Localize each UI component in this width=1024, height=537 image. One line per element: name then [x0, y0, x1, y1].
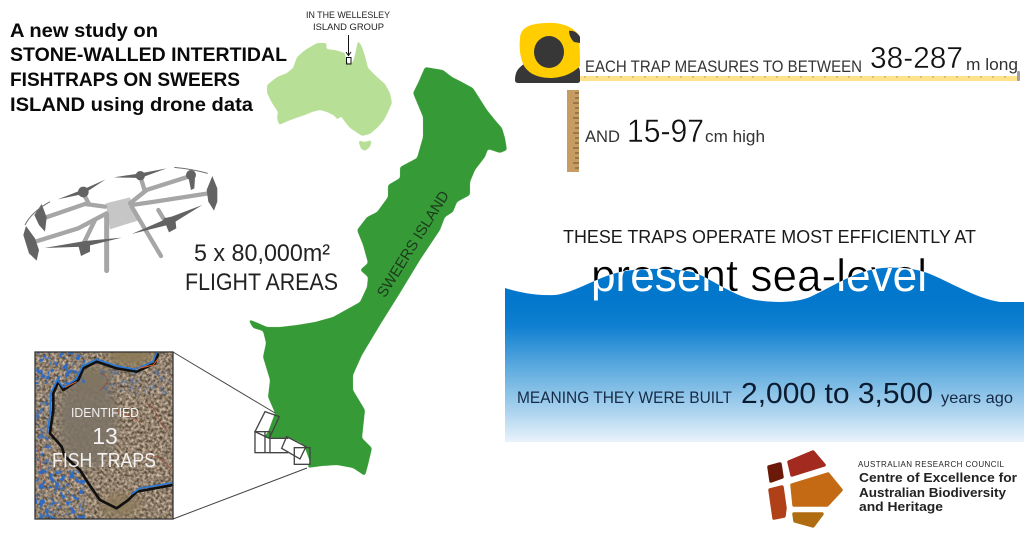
trap walls [37, 353, 173, 508]
logo text: Centre of Excellence for [859, 471, 1017, 485]
length text: EACH TRAP MEASURES TO BETWEEN [585, 58, 862, 76]
icon: drone [23, 167, 217, 271]
panel: sea wave [505, 268, 1024, 442]
label: identified 13 fish traps [52, 405, 156, 472]
flight areas label [185, 240, 338, 296]
height text: 15-97 [627, 113, 704, 149]
logo text: AUSTRALIAN RESEARCH COUNCIL [858, 460, 1005, 469]
flight areas label: FLIGHT AREAS [185, 269, 338, 296]
height text: cm high [705, 127, 765, 146]
icon: Australia map [267, 40, 392, 151]
logo: Centre of Excellence [769, 452, 841, 526]
text: built years ago: MEANING THEY WERE BUILT [517, 388, 732, 407]
text: built years ago: years ago [941, 390, 1013, 407]
map: Sweers Island [248, 67, 507, 476]
tape strip [580, 71, 1020, 81]
icon: ruler [567, 90, 579, 172]
flight areas label: 5 x 80,000m² [194, 240, 330, 267]
length text: m long [966, 55, 1018, 74]
title: FISHTRAPS ON SWEERS [10, 69, 240, 91]
heading: present sea-level (white under water): present sea-level [591, 250, 927, 301]
label: identified 13 fish traps: 13 [92, 423, 118, 449]
height text [585, 113, 765, 149]
label: identified 13 fish traps: FISH TRAPS [52, 450, 156, 472]
flight area boxes [255, 412, 310, 464]
logo text: and Heritage [859, 500, 943, 514]
title: STONE-WALLED INTERTIDAL [10, 44, 287, 66]
height text: AND [585, 128, 620, 146]
title: ISLAND using drone data [10, 94, 253, 116]
length text [585, 40, 1018, 76]
label: Wellesley Island Group [306, 10, 391, 33]
title: A new study on [10, 20, 158, 42]
text: built years ago: 2,000 to 3,500 [741, 378, 933, 410]
photo frame [35, 352, 173, 519]
arrow: to Wellesley Island Group [346, 35, 351, 64]
label: Wellesley Island Group: IN THE WELLESLEY [306, 10, 391, 21]
label: Wellesley Island Group: ISLAND GROUP [313, 22, 384, 33]
label: Sweers Island: SWEERS ISLAND [374, 188, 453, 301]
icon: tape measure [515, 23, 1020, 83]
text: built years ago [517, 378, 1013, 410]
logo text [858, 460, 1017, 514]
heading: operate most efficiently: THESE TRAPS OPERATE MOST EFFICIENTLY AT [563, 226, 976, 247]
length text: 38-287 [870, 40, 963, 75]
label: identified 13 fish traps: IDENTIFIED [71, 405, 139, 420]
logo text: Australian Biodiversity [859, 486, 1006, 500]
zoom lines [173, 352, 307, 519]
heading: present sea-level (dark): present sea-level [591, 250, 927, 301]
title [10, 20, 287, 116]
panel: drone image of fish trap [35, 343, 173, 519]
